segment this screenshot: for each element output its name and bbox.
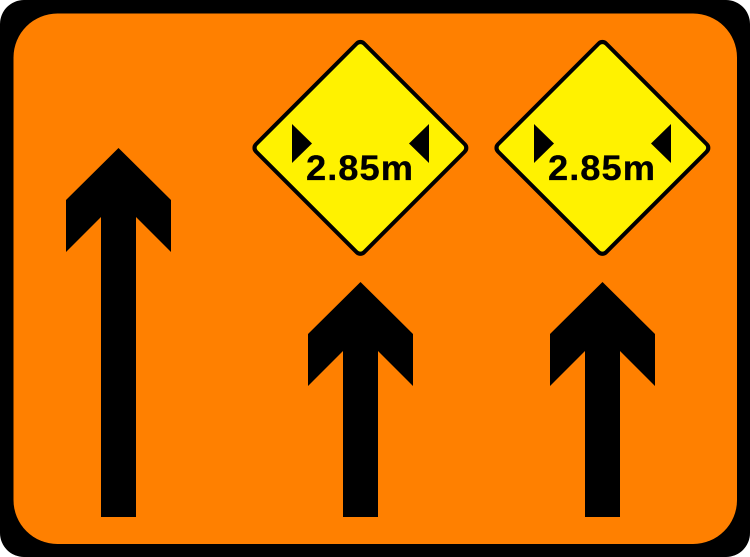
width restriction sign: right lane: 2.85m: [548, 149, 656, 188]
width restriction sign: right lane: [492, 37, 713, 259]
arrow: left lane, tall: [66, 148, 171, 517]
width restriction sign: centre lane: 2.85m: [306, 149, 414, 188]
arrow: centre lane: [308, 282, 413, 517]
arrow: right lane: [550, 282, 655, 517]
width restriction sign: centre lane: [250, 37, 471, 259]
